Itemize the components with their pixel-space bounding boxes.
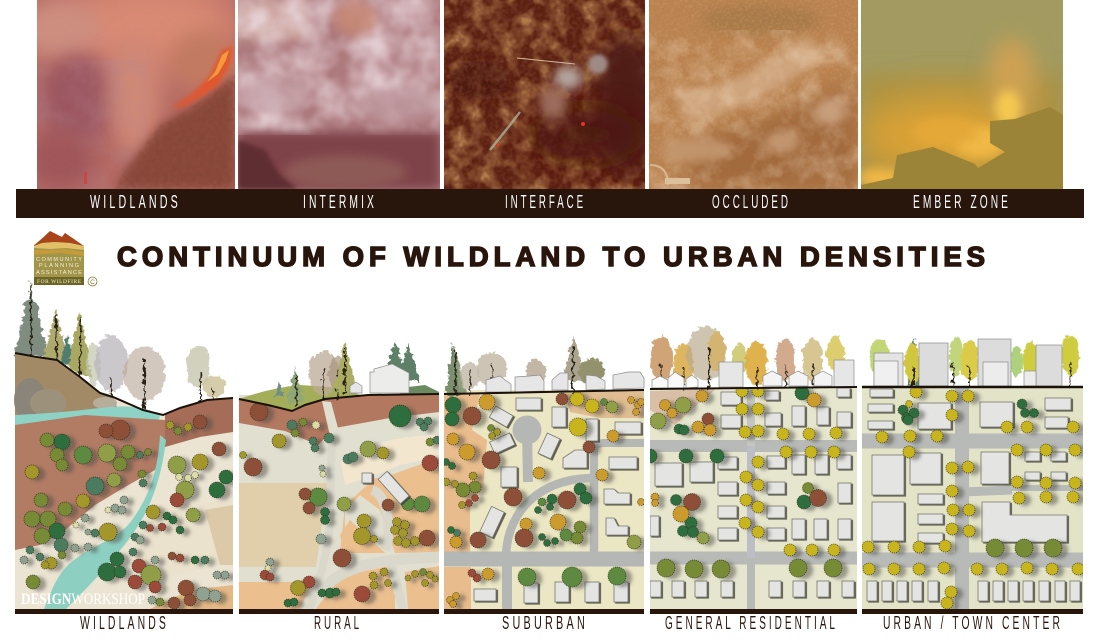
panel: suburban plan and section xyxy=(442,390,644,609)
trees: suburban xyxy=(442,392,644,608)
houses: suburban xyxy=(474,398,641,603)
top label band: OCCLUDED xyxy=(712,192,791,212)
houses: general residential xyxy=(650,388,854,597)
top label band: WILDLANDS xyxy=(90,192,181,212)
photo: intermix smoke xyxy=(238,0,440,189)
ground: wildlands xyxy=(14,353,233,609)
roads: urban xyxy=(862,387,1083,609)
top label band: INTERFACE xyxy=(505,192,586,212)
buildings: urban xyxy=(867,389,1080,601)
bottom labels: SUBURBAN xyxy=(502,613,588,633)
panel: rural plan and section xyxy=(239,394,441,609)
roads: suburban xyxy=(444,430,644,609)
logo: Community Planning Assistance for Wildfire xyxy=(34,231,97,286)
panel: general residential plan and section xyxy=(643,385,857,609)
top label band: EMBER ZONE xyxy=(913,192,1011,212)
title: CONTINUUM OF WILDLAND TO URBAN DENSITIES xyxy=(117,241,985,272)
road: rural driveway xyxy=(326,483,439,596)
logo: Community Planning Assistance for Wildfire: C xyxy=(90,279,95,286)
section: general residential skyline xyxy=(649,325,854,388)
trees: rural xyxy=(240,403,441,607)
trees: general residential xyxy=(643,385,842,578)
lower plan base bars xyxy=(15,609,1083,614)
section: suburban skyline xyxy=(444,335,644,395)
bottom labels xyxy=(80,613,1063,633)
photo: wildlands fire xyxy=(37,0,235,189)
logo: Community Planning Assistance for Wildfire: ASSISTANCE xyxy=(36,270,82,276)
top label band: INTERMIX xyxy=(303,192,377,212)
section trees: wildlands xyxy=(12,278,224,410)
photo: occluded aerial xyxy=(649,0,858,189)
trees: wildlands xyxy=(20,415,233,609)
stream: wildlands xyxy=(44,435,166,609)
buildings: rural xyxy=(362,471,409,504)
panel: wildlands plan and section xyxy=(12,278,233,609)
photo: interface aerial xyxy=(444,0,657,189)
logo: Community Planning Assistance for Wildfire: FOR WILDFIRE xyxy=(37,279,82,285)
ground line: general residential xyxy=(650,387,857,389)
bottom labels: GENERAL RESIDENTIAL xyxy=(665,613,838,633)
section: rural skyline xyxy=(239,340,439,411)
logo: Community Planning Assistance for Wildfire: PLANNING xyxy=(39,263,79,269)
bottom labels: WILDLANDS xyxy=(80,613,169,633)
top label band xyxy=(16,189,1084,218)
ground line: wildlands xyxy=(15,353,233,415)
ground line: rural xyxy=(239,394,439,411)
trees: urban xyxy=(862,386,1084,609)
photo: ember zone with house silhouettes xyxy=(858,0,1063,189)
ground line: suburban xyxy=(444,390,644,394)
ground line: urban xyxy=(862,386,1083,388)
logo: Community Planning Assistance for Wildfire: COMMUNITY xyxy=(36,257,82,263)
roads: general residential xyxy=(650,391,857,609)
section: urban skyline xyxy=(868,334,1078,387)
panel: urban / town center plan and section xyxy=(862,386,1084,609)
credit: Design Workshop: DESIGNWORKSHOP xyxy=(21,591,145,608)
bottom labels: RURAL xyxy=(314,613,362,633)
